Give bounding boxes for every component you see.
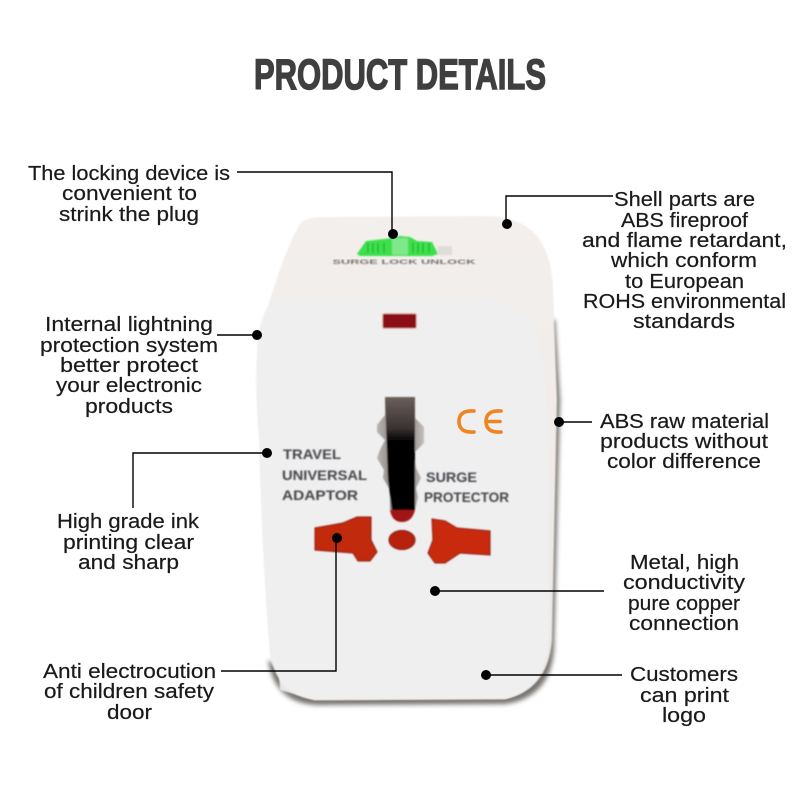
printed text: travel universal adaptor: TRAVEL <box>283 446 341 462</box>
callout: shell parts: ABS fireproof <box>621 210 748 232</box>
printed text: surge protector <box>424 469 509 505</box>
callout: pure copper <box>430 552 745 635</box>
callout: print logo: logo <box>662 705 706 727</box>
callout: safety door: Anti electrocution <box>43 661 216 683</box>
printed text: travel universal adaptor: ADAPTOR <box>282 487 358 503</box>
callout: high grade ink <box>57 448 272 574</box>
callout: pure copper: conductivity <box>623 572 745 594</box>
callout: lightning protection: your electronic <box>56 375 202 397</box>
green locking slider <box>357 236 452 256</box>
callout: shell parts: to European <box>625 271 744 293</box>
callout: shell parts: Shell parts are <box>614 189 755 211</box>
callout: lightning protection: products <box>85 396 173 418</box>
callout: locking device: The locking device is <box>28 163 230 185</box>
printed text: surge protector: PROTECTOR <box>424 489 509 505</box>
callout: locking device <box>28 163 398 239</box>
callout: ABS raw material: color difference <box>607 451 761 473</box>
adapter top body <box>258 216 557 700</box>
callout: shell parts <box>502 189 787 333</box>
callout: shell parts: ROHS environmental <box>583 291 786 313</box>
adapter front face <box>256 298 549 700</box>
printed text: surge protector: SURGE <box>426 469 477 485</box>
callout: high grade ink: High grade ink <box>57 511 200 533</box>
red indicator light <box>382 313 417 329</box>
callout: high grade ink: and sharp <box>78 552 179 574</box>
callout: ABS raw material: ABS raw material <box>600 411 769 433</box>
callout: pure copper: Metal, high <box>630 552 739 574</box>
adapter shadow <box>268 320 560 705</box>
printed text: travel universal adaptor: UNIVERSAL <box>282 467 367 483</box>
small top marking: SURGE LOCK UNLOCK <box>332 260 477 266</box>
left red socket <box>315 517 377 561</box>
callout: ABS raw material: products without <box>600 431 769 453</box>
callout: print logo <box>481 664 738 727</box>
printed text: travel universal adaptor <box>282 446 367 503</box>
callout: locking device: convenient to <box>62 183 197 205</box>
callout: print logo: Customers <box>630 664 738 686</box>
callout: ABS raw material <box>554 411 769 473</box>
CE mark <box>459 411 501 432</box>
product: travel adapter <box>256 216 560 705</box>
callout: safety door <box>43 533 342 724</box>
callout: lightning protection <box>40 314 262 418</box>
callout: high grade ink: printing clear <box>63 532 194 554</box>
callout: pure copper: connection <box>629 613 739 635</box>
right red socket <box>428 519 490 563</box>
centre red socket <box>389 530 415 550</box>
callout: lightning protection: better protect <box>60 355 199 377</box>
callout: lightning protection: protection system <box>40 335 218 357</box>
callout: locking device: strink the plug <box>59 204 199 226</box>
callout: shell parts: and flame retardant, <box>582 230 787 252</box>
title: PRODUCT DETAILS <box>254 51 546 99</box>
callout: lightning protection: Internal lightning <box>45 314 213 336</box>
callout: print logo: can print <box>640 685 730 707</box>
vertical socket slot <box>377 397 424 522</box>
callout: shell parts: which conform <box>610 250 757 272</box>
callout: pure copper: pure copper <box>628 593 740 615</box>
callout: shell parts: standards <box>633 311 735 333</box>
callout: safety door: door <box>107 702 152 724</box>
callout: safety door: of children safety <box>44 681 214 703</box>
